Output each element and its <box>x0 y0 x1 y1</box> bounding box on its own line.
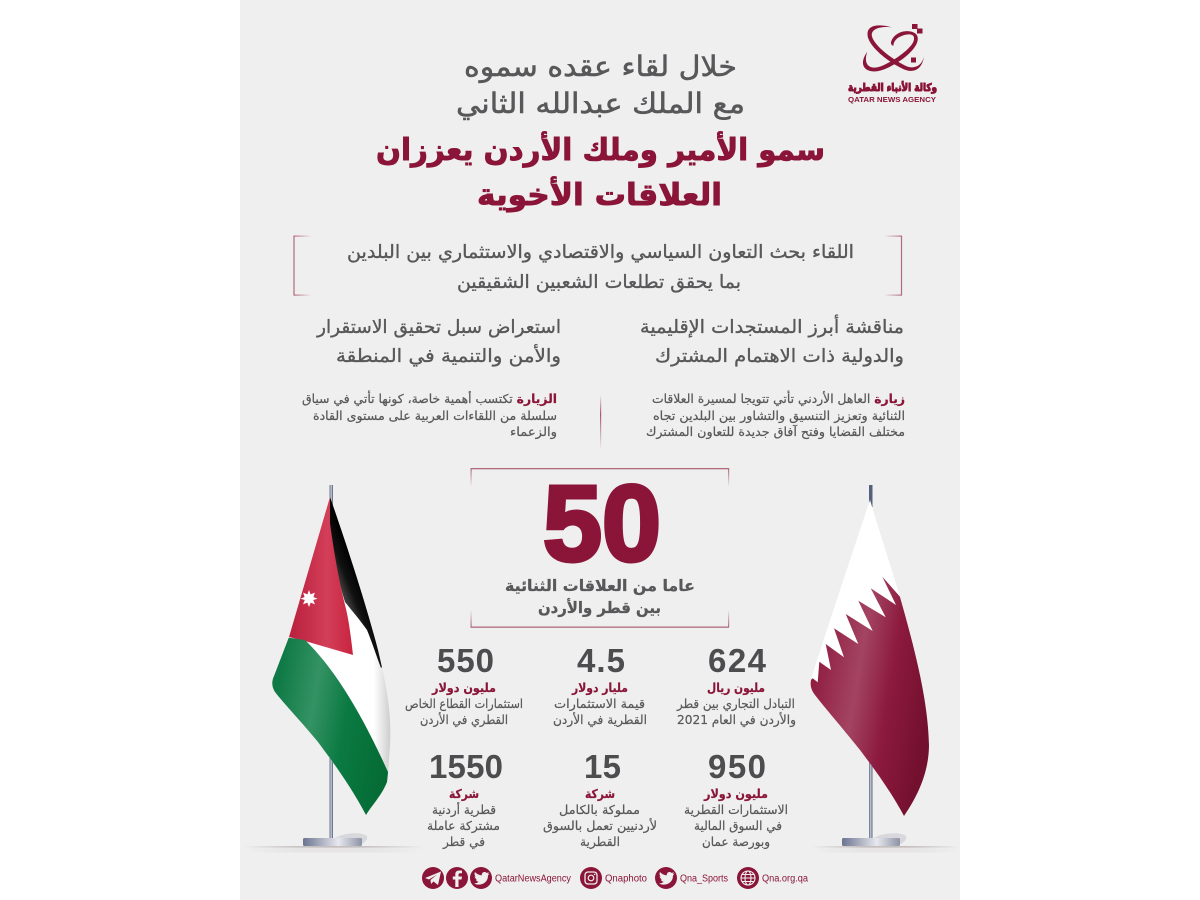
stat: 15: مملوكة بالكامل <box>559 803 640 818</box>
stat: 1550: قطرية أردنية <box>432 802 496 818</box>
text block: regional developments: مناقشة أبرز المستجدات الإقليمية <box>640 314 904 338</box>
text block: the visit, right: الثنائية وتعزيز التنسيق والتشاور بين البلدين تجاه <box>653 409 905 424</box>
heading: intro lines: خلال لقاء عقده سموه <box>464 50 737 83</box>
stat: 550 <box>405 642 523 728</box>
stat: 15 <box>543 748 657 850</box>
icon: twitter sports <box>655 867 677 889</box>
stat: 624: التبادل التجاري بين قطر <box>676 697 795 712</box>
link: Qna.org.qa: Qna.org.qa <box>762 874 808 884</box>
text block: the visit, right: زيارة العاهل الأردني تأتي تتويجا لمسيرة العلاقات <box>652 390 905 407</box>
title <box>376 131 825 213</box>
stat: 1550: 1550 <box>429 748 503 785</box>
text block: the visit, right: مختلف القضايا وفتح آفاق جديدة للتعاون المشترك <box>646 424 905 440</box>
text block: the visit, left: سلسلة من اللقاءات العربية على مستوى القادة <box>313 409 557 424</box>
callout: 50 years: عاما من العلاقات الثنائية <box>505 577 695 595</box>
stat: 4.5 <box>553 642 647 728</box>
icon: telegram <box>422 867 444 889</box>
stat: 1550: مشتركة عاملة <box>427 819 500 834</box>
stat: 15: شركة <box>585 787 615 801</box>
text block: the visit, left <box>302 390 557 440</box>
stat: 624: مليون ريال <box>707 681 765 695</box>
stat: 15: 15 <box>584 748 621 785</box>
text block: the visit, left: الزيارة تكتسب أهمية خاصة، كونها تأتي في سياق <box>302 390 557 407</box>
logo: Qatar News Agency: QATAR NEWS AGENCY <box>848 95 936 104</box>
stat: 1550: في قطر <box>442 835 485 850</box>
heading: intro lines <box>456 50 745 120</box>
stat: 550: استثمارات القطاع الخاص <box>405 697 523 712</box>
text block: stability and security <box>316 317 561 367</box>
heading: intro lines: مع الملك عبدالله الثاني <box>456 87 745 120</box>
logo: Qatar News Agency: وكالة الأنباء القطرية <box>848 81 937 94</box>
stat: 624 <box>676 642 796 728</box>
link: Qna_Sports: Qna_Sports <box>680 874 728 884</box>
text block: stability and security: والأمن والتنمية في المنطقة <box>336 344 561 367</box>
text block: stability and security: استعراض سبل تحقيق الاستقرار <box>316 317 561 338</box>
stat: 4.5: القطرية في الأردن <box>553 712 647 728</box>
stat: 950: مليون دولار <box>703 787 768 801</box>
stat: 950: في السوق المالية <box>694 819 782 834</box>
stat: 624: 624 <box>708 642 767 679</box>
bracketed statement: بما يحقق تطلعات الشعبين الشقيقين <box>457 272 741 293</box>
link: QatarNewsAgency: QatarNewsAgency <box>495 874 571 884</box>
text block: the visit, right <box>646 390 905 440</box>
icon: instagram <box>580 867 602 889</box>
stat: 1550: شركة <box>449 787 479 801</box>
callout: 50 years <box>470 462 729 628</box>
stat: 15: لأردنيين تعمل بالسوق <box>543 818 657 834</box>
stat: 950 <box>684 748 788 850</box>
logo: Qatar News Agency <box>848 24 937 104</box>
callout: 50 years: بين قطر والأردن <box>538 598 661 617</box>
icon: twitter <box>470 867 492 889</box>
stat: 550: 550 <box>437 642 494 679</box>
text block: regional developments <box>640 314 904 367</box>
stat: 950: 950 <box>708 748 766 785</box>
social links footer <box>422 867 808 889</box>
bracketed statement: اللقاء بحث التعاون السياسي والاقتصادي والاستثماري بين البلدين <box>347 242 854 263</box>
stat: 550: القطري في الأردن <box>420 712 508 728</box>
title: العلاقات الأخوية <box>477 176 722 213</box>
stat: 550: مليون دولار <box>431 681 496 695</box>
icon: globe <box>737 867 759 889</box>
link: Qnaphoto: Qnaphoto <box>605 874 647 884</box>
text block: regional developments: والدولية ذات الاهتمام المشترك <box>655 346 904 367</box>
stat: 950: وبورصة عمان <box>702 835 770 850</box>
stat: 4.5: 4.5 <box>577 642 625 679</box>
icon: facebook <box>446 867 468 889</box>
stat: 950: الاستثمارات القطرية <box>684 803 788 818</box>
stat: 1550 <box>427 748 503 850</box>
title: سمو الأمير وملك الأردن يعززان <box>376 131 825 168</box>
icon: Qatar flag on stand <box>810 485 952 852</box>
text block: the visit, left: والزعماء <box>510 425 557 440</box>
stat: 15: القطرية <box>580 835 620 850</box>
background panel <box>240 0 960 900</box>
stat: 624: والأردن في العام 2021 <box>677 712 796 728</box>
stat: 4.5: قيمة الاستثمارات <box>554 697 645 712</box>
bracketed statement <box>294 236 902 296</box>
stat: 4.5: مليار دولار <box>571 681 628 695</box>
callout: 50 years: 50 <box>543 462 661 584</box>
icon: Jordan flag on stand <box>243 485 423 852</box>
